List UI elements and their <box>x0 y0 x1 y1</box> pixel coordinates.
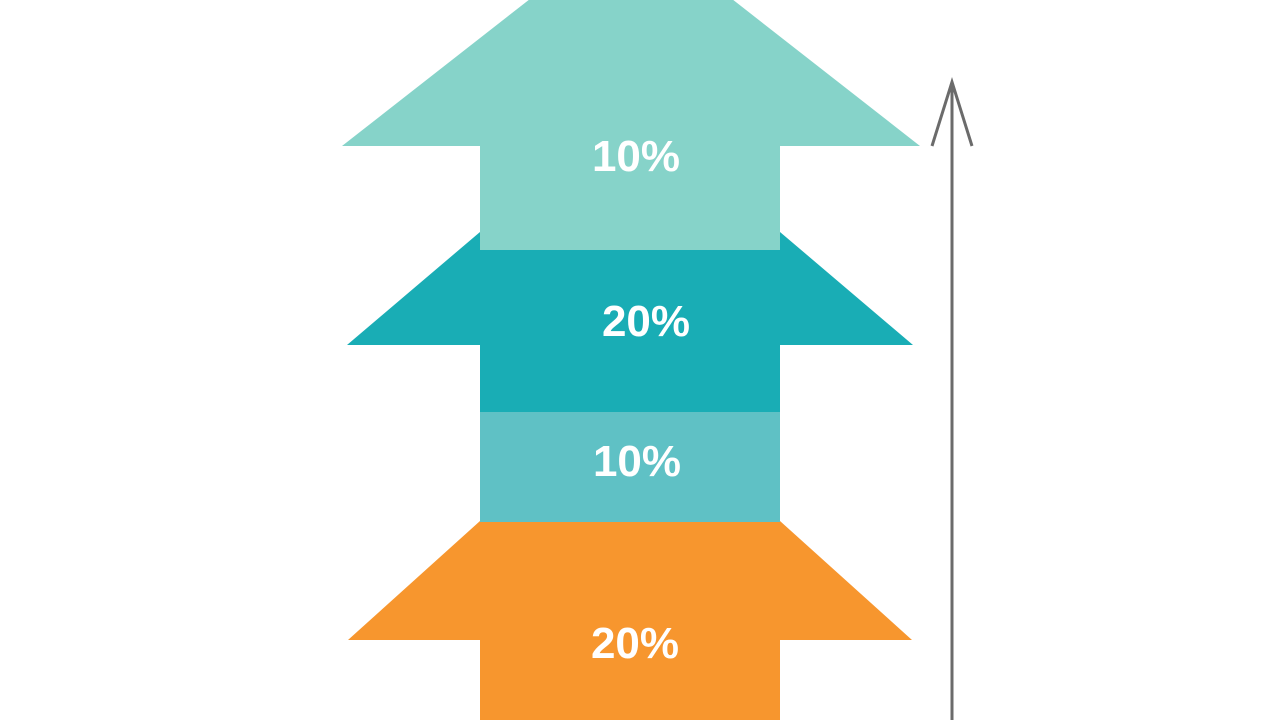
label: 20% second: 20% <box>602 297 690 346</box>
arrow 2: teal <box>347 232 913 412</box>
label: 10% top: 10% <box>592 132 680 181</box>
axis arrow: upward <box>932 82 972 720</box>
block 3: mid teal <box>480 412 780 522</box>
label: 20% bottom: 20% <box>591 619 679 668</box>
arrow 1: light teal top <box>342 0 920 250</box>
arrow 4: orange bottom <box>348 521 912 720</box>
label: 10% middle: 10% <box>593 437 681 486</box>
